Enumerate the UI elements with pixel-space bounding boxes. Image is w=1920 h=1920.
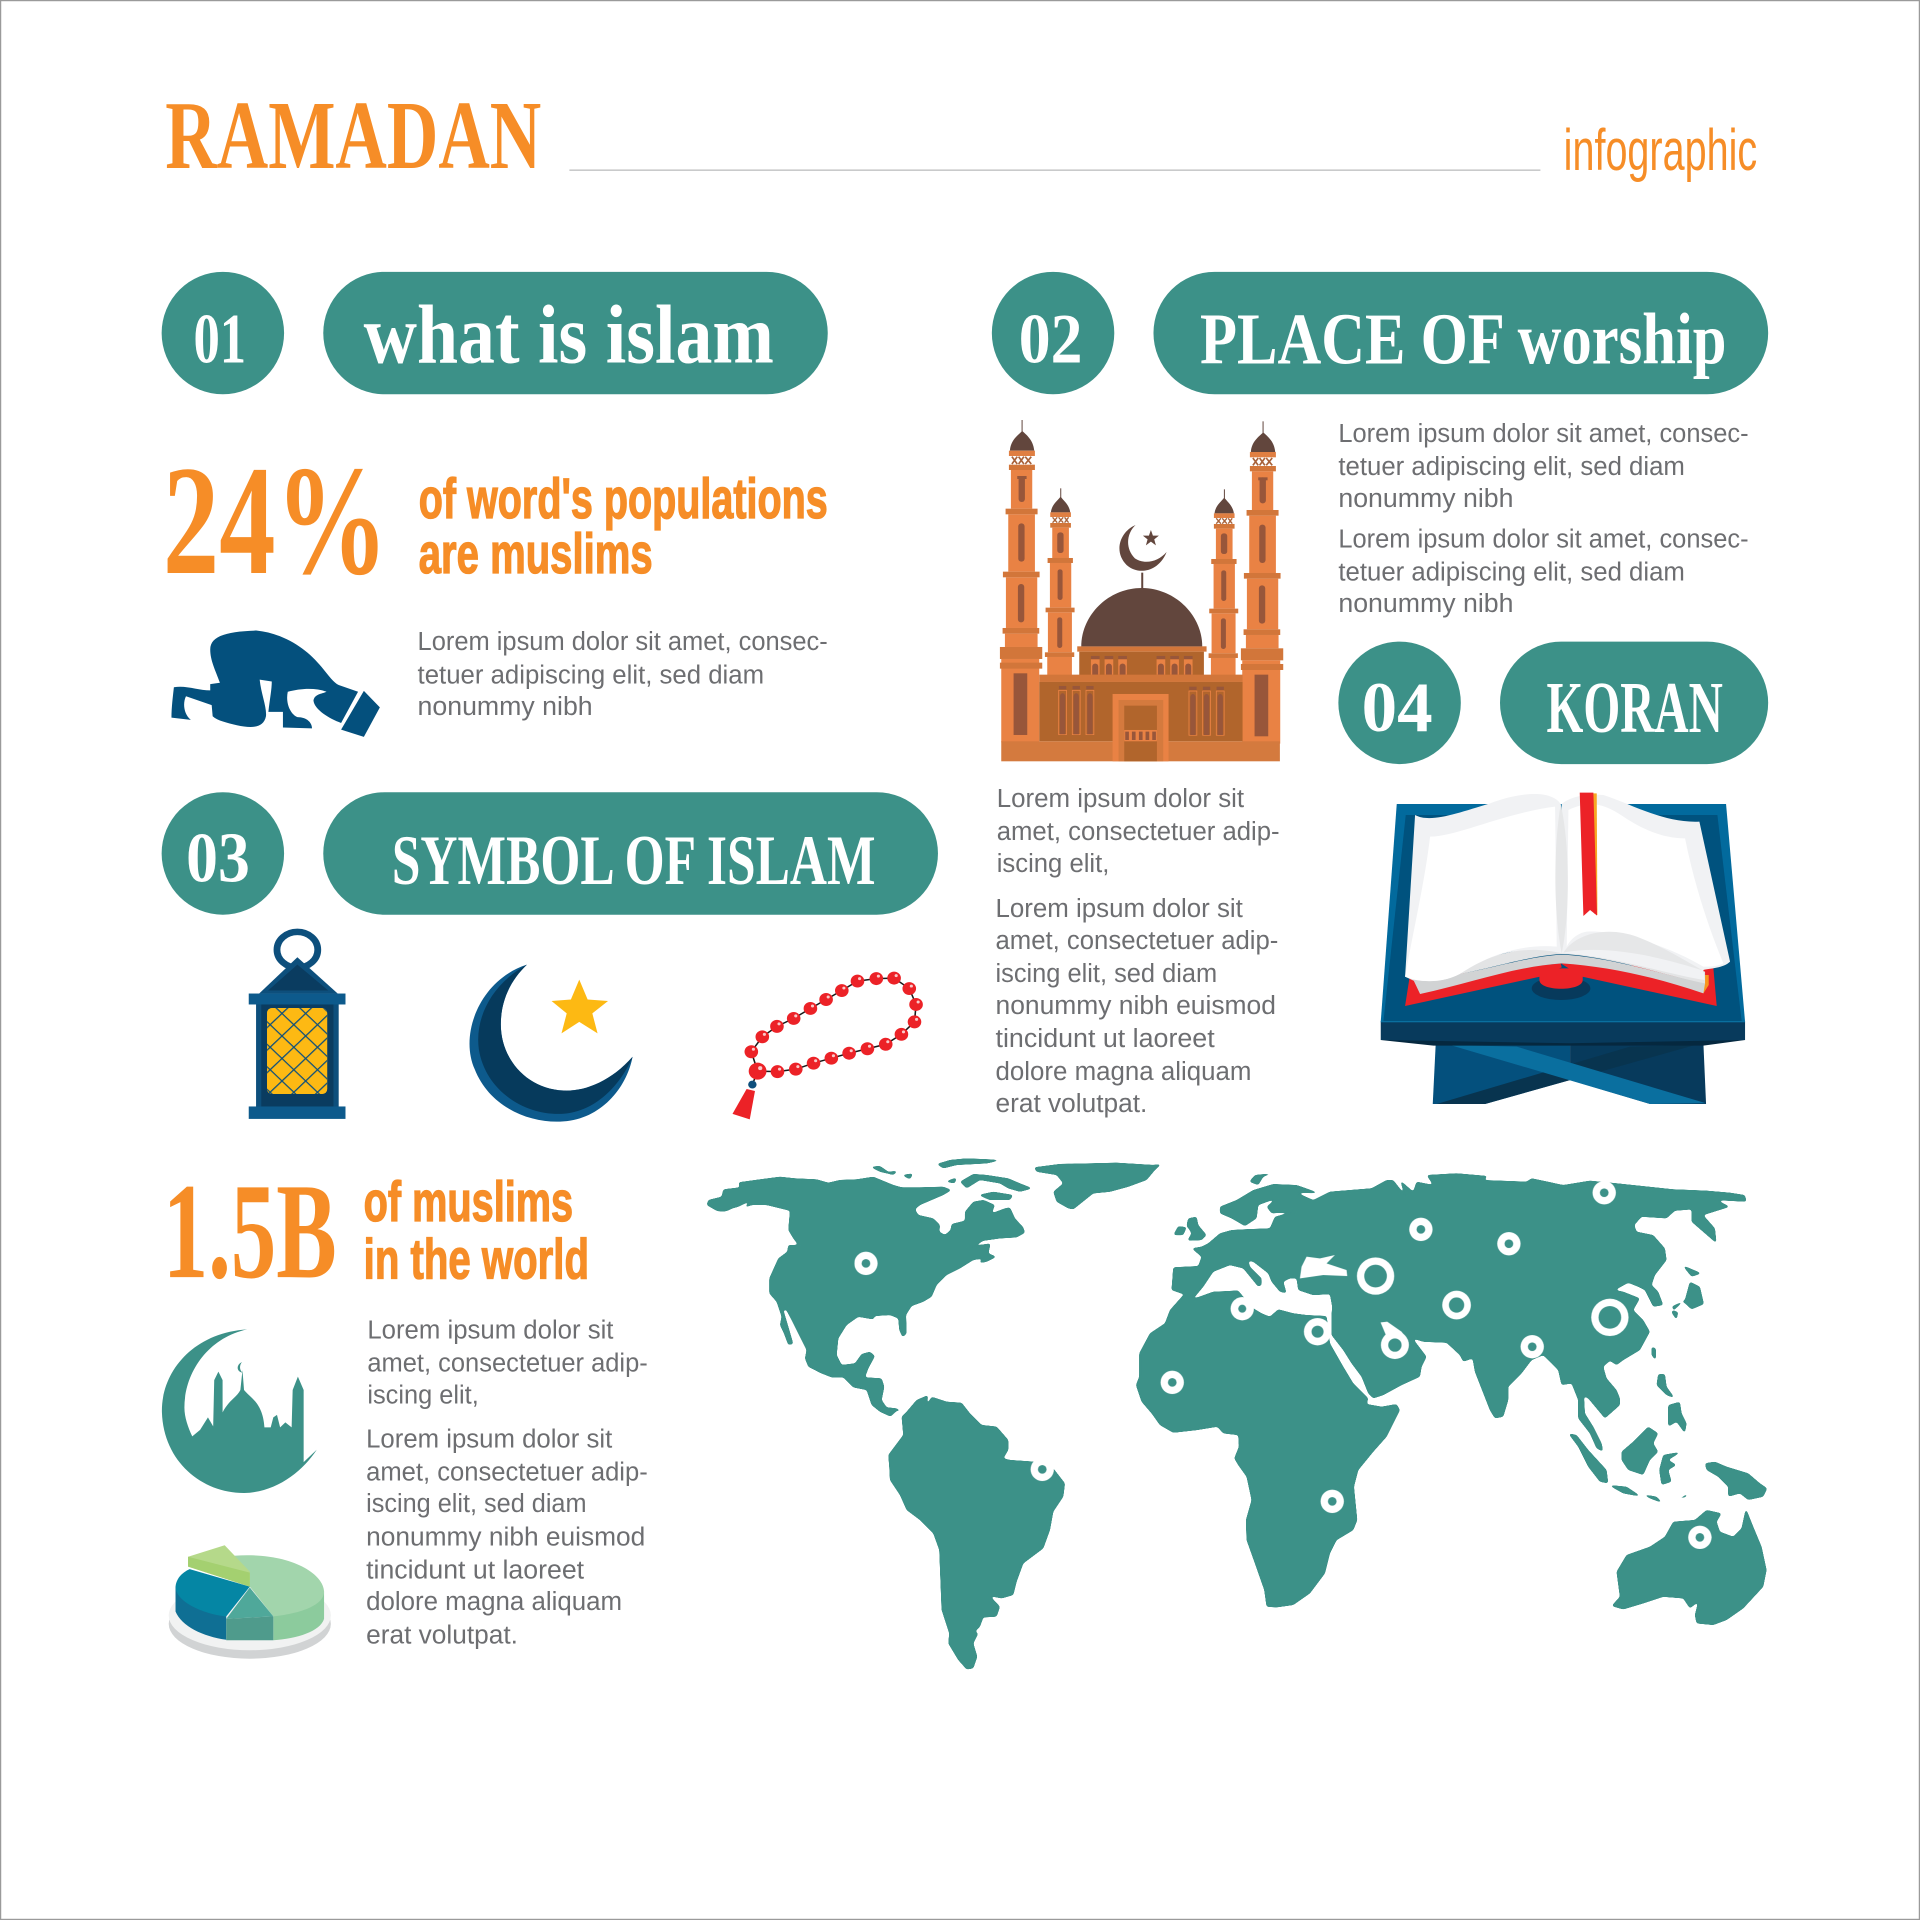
stat: 24 percent: of word's populations: [419, 467, 828, 530]
text block: muslims in the world: tincidunt ut laoreet: [366, 1554, 585, 1584]
text block: place of worship bottom: Lorem ipsum dolor sit: [996, 893, 1244, 923]
text block: place of worship top: nonummy nibh: [1338, 483, 1513, 513]
text block: muslims in the world: iscing elit,: [367, 1379, 479, 1409]
map: inland seas: [1300, 1255, 1408, 1341]
text block: what is islam: nonummy nibh: [418, 691, 593, 721]
section 01 heading: [162, 272, 828, 394]
text block: muslims in the world: Lorem ipsum dolor sit: [367, 1314, 614, 1344]
text block: muslims in the world: iscing elit, sed diam: [366, 1488, 587, 1518]
icon: crescent and star: [470, 965, 633, 1122]
text block: muslims in the world: amet, consectetuer adip-: [367, 1347, 648, 1377]
text block: place of worship top: Lorem ipsum dolor sit amet, consec-: [1338, 523, 1749, 553]
text block: muslims in the world: erat volutpat.: [366, 1619, 518, 1649]
text block: what is islam: tetuer adipiscing elit, sed diam: [418, 659, 764, 689]
section 04 heading: [1338, 642, 1768, 764]
text block: place of worship bottom: erat volutpat.: [996, 1088, 1147, 1118]
map: north america: [688, 1177, 1025, 1417]
text block: place of worship bottom: amet, consectetuer adip-: [997, 816, 1280, 846]
text block: place of worship bottom: dolore magna aliquam: [996, 1056, 1251, 1086]
section 04 heading: KORAN: [1547, 667, 1723, 748]
stat: 1.5B: 1.5B: [163, 1155, 337, 1307]
text block: place of worship bottom: amet, consectetuer adip-: [996, 925, 1278, 955]
icon: open koran on stand: [1381, 793, 1745, 1104]
icon: 3D pie chart: [169, 1545, 331, 1659]
text block: place of worship top: nonummy nibh: [1338, 588, 1513, 618]
stat: 24 percent: are muslims: [419, 522, 653, 585]
text block: muslims in the world: dolore magna aliquam: [366, 1586, 622, 1616]
text block: place of worship bottom: iscing elit, sed diam: [996, 958, 1217, 988]
icon: crescent with mosque silhouette: [162, 1329, 317, 1493]
map: eurasia: [1172, 1173, 1747, 1452]
text block: place of worship top: [1338, 418, 1749, 618]
section 01 heading: 01: [193, 300, 246, 378]
stat: 1.5B: in the world: [364, 1227, 589, 1290]
icon: praying figure: [171, 631, 380, 737]
title: RAMADAN: [165, 82, 541, 190]
subtitle: infographic: [1564, 118, 1757, 183]
text block: what is islam: [418, 626, 828, 721]
section 03 heading: 03: [186, 820, 250, 898]
section 02 heading: [992, 272, 1768, 394]
stat: 1.5B: [163, 1155, 589, 1307]
map: south america: [888, 1395, 1065, 1669]
text block: muslims in the world: amet, consectetuer adip-: [366, 1456, 648, 1486]
map: australia: [1612, 1508, 1767, 1625]
section 01 heading: what is islam: [364, 289, 774, 381]
text block: muslims in the world: nonummy nibh euismod: [366, 1521, 645, 1551]
stat: 1.5B: of muslims: [364, 1170, 573, 1233]
map: location markers: [854, 1181, 1712, 1549]
text block: place of worship bottom: tincidunt ut laoreet: [996, 1023, 1215, 1053]
header: [165, 82, 1757, 190]
section 02 heading: PLACE OF worship: [1200, 299, 1727, 380]
text block: what is islam: Lorem ipsum dolor sit amet, consec-: [418, 626, 828, 656]
map: greenland: [1034, 1163, 1162, 1209]
text block: place of worship bottom: [996, 783, 1280, 1118]
text block: place of worship bottom: iscing elit,: [997, 848, 1109, 878]
section 03 heading: [162, 792, 938, 915]
icon: lantern: [249, 932, 345, 1119]
icon: prayer beads: [732, 972, 923, 1119]
map: arctic islands: [870, 1158, 1033, 1200]
text block: place of worship bottom: nonummy nibh euismod: [996, 990, 1276, 1020]
text block: place of worship top: Lorem ipsum dolor sit amet, consec-: [1338, 418, 1749, 448]
text block: muslims in the world: Lorem ipsum dolor sit: [366, 1423, 613, 1453]
text block: place of worship top: tetuer adipiscing elit, sed diam: [1338, 556, 1685, 586]
text block: muslims in the world: [366, 1314, 648, 1649]
icon: mosque: [1000, 420, 1283, 761]
map: asia pacific islands: [1568, 1265, 1767, 1503]
text block: place of worship bottom: Lorem ipsum dolor sit: [997, 783, 1245, 813]
text block: place of worship top: tetuer adipiscing elit, sed diam: [1338, 451, 1685, 481]
map: land masses: [688, 1158, 1767, 1669]
stat: 24 percent: [163, 433, 828, 607]
stat: 24 percent: 24%: [163, 433, 388, 607]
world map with location markers: [688, 1158, 1767, 1669]
map: africa: [1136, 1291, 1400, 1607]
map: europe islands: [1173, 1173, 1277, 1241]
section 02 heading: 02: [1019, 300, 1082, 378]
header rule: [569, 169, 1540, 171]
section 03 heading: SYMBOL OF ISLAM: [392, 822, 876, 900]
section 04 heading: 04: [1362, 669, 1433, 747]
